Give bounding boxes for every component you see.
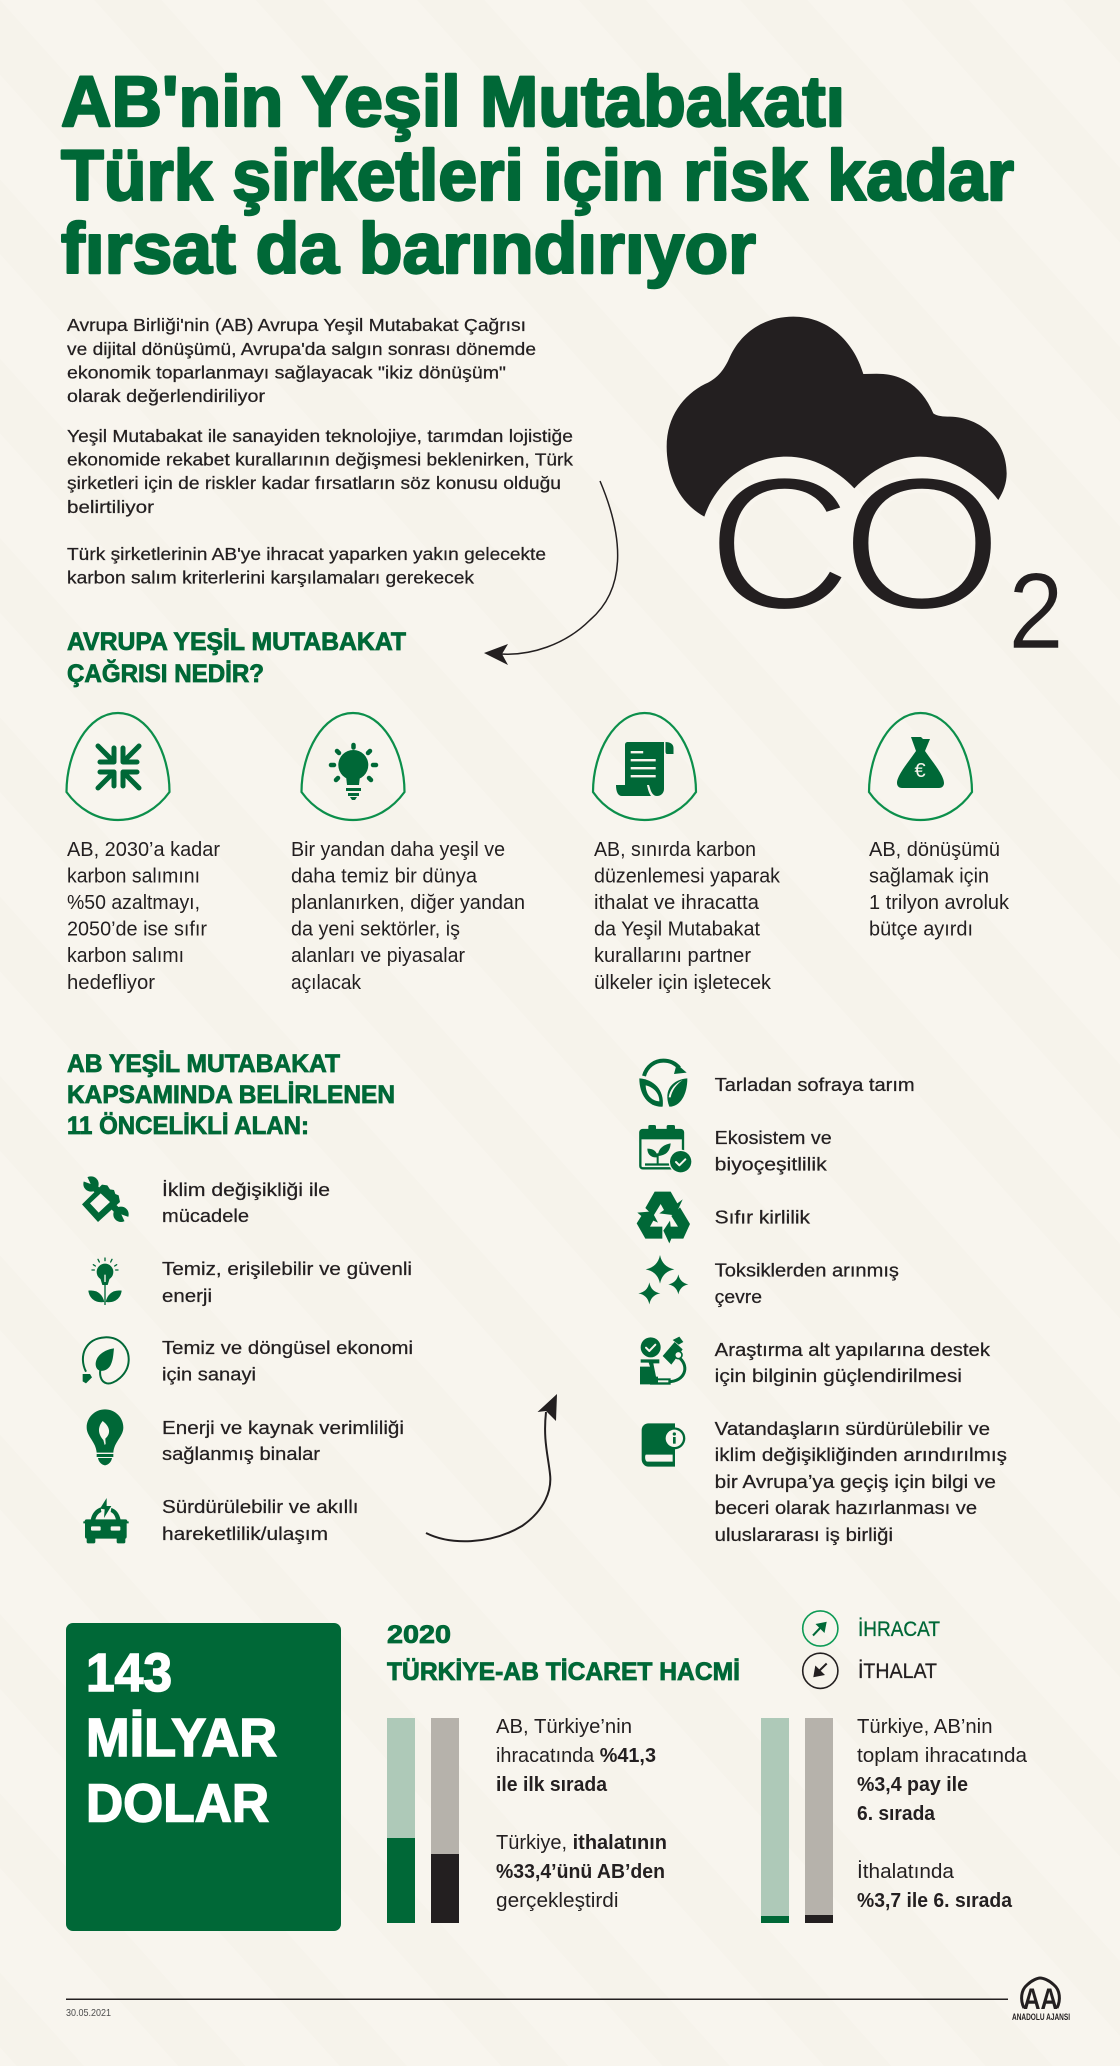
text: item toxic-free — [715, 1260, 899, 1307]
text: item citizens: uluslararası iş birliği — [715, 1524, 893, 1545]
text: card 2: alanları ve piyasalar — [291, 945, 465, 967]
text: item industry — [162, 1337, 413, 1384]
text: card 1: karbon salımını — [67, 866, 200, 888]
icon: CO2 cloud: 2 — [1008, 550, 1064, 671]
item: buildings — [87, 1409, 404, 1465]
text: item climate: İklim değişikliği ile — [162, 1179, 330, 1200]
text: item citizens — [715, 1418, 1007, 1545]
icon: sparkles — [638, 1255, 688, 1304]
text: item farm to fork: Tarladan sofraya tarım — [715, 1074, 915, 1095]
text: EU share: Türkiye, ithalatının — [496, 1832, 667, 1854]
icon: bulb with leaf — [87, 1409, 123, 1465]
text: card 1: AB, 2030’a kadar — [67, 839, 220, 861]
icon: bulb plant — [88, 1258, 122, 1305]
intro text: Türk şirketlerinin AB'ye ihracat yaparken yakın gelecekte — [67, 544, 546, 564]
text: EU share: gerçekleştirdi — [496, 1890, 618, 1912]
text: item research — [715, 1339, 991, 1386]
legend: import: İTHALAT — [858, 1660, 937, 1683]
heading: what is the green deal call: ÇAĞRISI NEDİR? — [67, 659, 264, 688]
text: Turkey share: 6. sırada — [857, 1803, 936, 1825]
intro text: Avrupa Birliği'nin (AB) Avrupa Yeşil Mutabakat Çağrısı — [67, 315, 526, 335]
panel: card 2 — [291, 713, 525, 994]
heading: 2020 trade volume — [387, 1621, 740, 1686]
intro text: Yeşil Mutabakat ile sanayiden teknolojiye, tarımdan lojistiğe — [67, 426, 573, 446]
intro text: olarak değerlendiriliyor — [67, 386, 265, 406]
item: energy — [88, 1258, 412, 1306]
heading: what is the green deal call: AVRUPA YEŞİL MUTABAKAT — [67, 628, 406, 656]
text: item citizens: bir Avrupa’ya geçiş için bilgi ve — [715, 1471, 996, 1492]
text: EU share: AB, Türkiye’nin — [496, 1716, 632, 1738]
arrow: squiggle up — [426, 1394, 557, 1541]
icon: calendar with plant — [640, 1125, 693, 1174]
intro text: ekonomide rekabet kurallarının değişmesi beklenirken, Türk — [67, 450, 573, 470]
intro text: ve dijital dönüşümü, Avrupa'da salgın sonrası dönemde — [67, 339, 536, 359]
panel: 143 billion dollars: 143 — [86, 1643, 172, 1703]
footer line — [66, 1998, 1008, 2000]
item: zero pollution — [637, 1192, 811, 1243]
text: card 2: daha temiz bir dünya — [291, 866, 478, 888]
item: climate — [81, 1174, 330, 1226]
icon: egg light bulb — [302, 713, 404, 820]
text: item ecosystem: Ekosistem ve — [715, 1127, 832, 1148]
panel: 143 billion dollars: MİLYAR — [86, 1708, 277, 1768]
text: card 2: planlanırken, diğer yandan — [291, 892, 525, 914]
title: AB'nin Yeşil Mutabakatı — [61, 63, 845, 142]
item: mobility — [83, 1496, 359, 1544]
text: EU share: %33,4’ünü AB’den — [496, 1861, 665, 1883]
icon: book with info — [642, 1423, 685, 1467]
text: EU share: ihracatında %41,3 — [496, 1745, 656, 1767]
text: card 2: açılacak — [291, 972, 362, 994]
text: item buildings — [162, 1417, 404, 1464]
icon: electric car — [83, 1498, 129, 1543]
legend — [803, 1611, 940, 1688]
heading: 2020 trade volume: TÜRKİYE-AB TİCARET HACMİ — [387, 1657, 740, 1686]
text: card 1: %50 azaltmayı, — [67, 892, 200, 914]
chart: EU share bars — [387, 1718, 459, 1923]
icon: CO2 cloud: O — [841, 438, 1003, 650]
text: card 3: ülkeler için işletecek — [594, 972, 772, 994]
heading: 11 priority areas: 11 ÖNCELİKLİ ALAN: — [67, 1111, 309, 1140]
item: citizens — [642, 1418, 1007, 1545]
intro text: şirketleri için de riskler kadar fırsatların söz konusu olduğu — [67, 473, 561, 493]
text: item energy: Temiz, erişilebilir ve güvenli — [162, 1258, 412, 1279]
date: 30.05.2021 — [66, 2007, 111, 2019]
chart: Turkey share bars — [761, 1718, 833, 1923]
item: farm to fork — [639, 1061, 915, 1107]
item: research — [640, 1337, 991, 1386]
text: card 2: Bir yandan daha yeşil ve — [291, 839, 505, 861]
icon: farm leaves cycle — [639, 1061, 687, 1107]
icon: CO2 cloud — [667, 317, 1064, 671]
intro text — [67, 315, 573, 588]
text: card 4: AB, dönüşümü — [869, 839, 1000, 861]
item: industry — [83, 1337, 413, 1384]
panel: 143 billion dollars: DOLAR — [86, 1774, 269, 1834]
text: Turkey share — [857, 1716, 1028, 1912]
panel: card 4 — [869, 713, 1010, 941]
text: item toxic-free: Toksiklerden arınmış — [715, 1260, 899, 1280]
text: card 3 — [594, 839, 781, 994]
intro text: ekonomik toparlanmayı sağlayacak "ikiz dönüşüm" — [67, 362, 506, 382]
text: card 3: düzenlemesi yaparak — [594, 866, 781, 888]
text: card 1: karbon salımı — [67, 945, 184, 967]
text: card 1 — [67, 839, 220, 994]
icon: CO2 cloud: C — [707, 438, 852, 650]
icon: leaf circuit — [83, 1337, 129, 1384]
text: Turkey share: %3,7 ile 6. sırada — [857, 1890, 1013, 1912]
text: card 1: 2050’de ise sıfır — [67, 919, 207, 941]
title: Türk şirketleri için risk kadar — [61, 137, 1014, 216]
text: item industry: Temiz ve döngüsel ekonomi — [162, 1337, 413, 1358]
text: item citizens: beceri olarak hazırlanması ve — [715, 1497, 977, 1518]
text: card 4: bütçe ayırdı — [869, 919, 973, 941]
title: fırsat da barındırıyor — [61, 210, 756, 289]
legend: export: İHRACAT — [858, 1618, 940, 1641]
text: card 4 — [869, 839, 1010, 941]
text: item toxic-free: çevre — [715, 1286, 762, 1307]
heading: 2020 trade volume: 2020 — [387, 1621, 451, 1649]
text: item climate: mücadele — [162, 1205, 249, 1226]
text: item energy: enerji — [162, 1285, 212, 1306]
text: item research: Araştırma alt yapılarına destek — [715, 1339, 991, 1360]
text: card 3: AB, sınırda karbon — [594, 839, 756, 861]
text: item buildings: sağlanmış binalar — [162, 1443, 320, 1464]
text: item citizens: Vatandaşların sürdürülebilir ve — [715, 1418, 990, 1439]
text: Turkey share: toplam ihracatında — [857, 1745, 1028, 1767]
list: right priority areas — [637, 1061, 1007, 1545]
text: card 3: da Yeşil Mutabakat — [594, 919, 760, 941]
text: Turkey share: Türkiye, AB’nin — [857, 1716, 992, 1738]
icon: egg arrows — [66, 713, 170, 820]
logo: Anadolu Ajansı: ANADOLU AJANSI — [1012, 2012, 1070, 2022]
text: item mobility — [162, 1496, 358, 1544]
text: card 2: da yeni sektörler, iş — [291, 919, 460, 941]
logo: Anadolu Ajansı: AA — [1023, 1983, 1058, 2016]
icon: egg money bag — [869, 713, 972, 820]
text: card 4: 1 trilyon avroluk — [869, 892, 1010, 914]
text: card 2 — [291, 839, 525, 994]
list: left priority areas — [81, 1174, 413, 1544]
text: item mobility: Sürdürülebilir ve akıllı — [162, 1496, 358, 1517]
text: item research: için bilginin güçlendirilmesi — [715, 1365, 962, 1386]
heading: 11 priority areas: KAPSAMINDA BELİRLENEN — [67, 1081, 395, 1109]
text: item buildings: Enerji ve kaynak verimliliği — [162, 1417, 404, 1438]
text: item ecosystem — [715, 1127, 832, 1174]
panel: 143 billion dollars — [66, 1623, 341, 1931]
item: ecosystem — [640, 1125, 832, 1174]
logo: Anadolu Ajansı — [1012, 1978, 1070, 2022]
text: item industry: için sanayi — [162, 1364, 256, 1384]
text: Turkey share: %3,4 pay ile — [857, 1774, 968, 1796]
text: EU share — [496, 1716, 667, 1912]
icon: wrench in hand — [81, 1174, 131, 1224]
heading: 11 priority areas — [67, 1050, 395, 1140]
text: card 4: sağlamak için — [869, 866, 989, 888]
text: item energy — [162, 1258, 412, 1306]
heading: what is the green deal call — [67, 628, 406, 688]
text: card 3: ithalat ve ihracatta — [594, 892, 760, 914]
panel: card 3 — [593, 713, 781, 994]
icon: egg scroll — [593, 713, 696, 820]
item: toxic-free — [638, 1255, 899, 1307]
icon: microscope — [640, 1337, 685, 1385]
text: item zero pollution: Sıfır kirlilik — [715, 1206, 811, 1228]
text: card 1: hedefliyor — [67, 972, 155, 994]
text: Turkey share: İthalatında — [857, 1860, 955, 1883]
icon: recycle — [637, 1192, 690, 1243]
intro text: karbon salım kriterlerini karşılamaları gerekecek — [67, 568, 474, 588]
intro text: belirtiliyor — [67, 497, 154, 517]
arrow: curved to heading — [484, 481, 618, 665]
text: EU share: ile ilk sırada — [496, 1774, 608, 1796]
heading: 11 priority areas: AB YEŞİL MUTABAKAT — [67, 1050, 340, 1078]
panel: card 1 — [66, 713, 220, 994]
title — [61, 63, 1014, 289]
icon: egg money bag: € — [914, 760, 926, 782]
text: item citizens: iklim değişikliğinden arındırılmış — [715, 1444, 1007, 1465]
text: card 3: kurallarını partner — [594, 945, 751, 967]
text: item mobility: hareketlilik/ulaşım — [162, 1523, 328, 1544]
text: item climate — [162, 1179, 330, 1226]
text: item ecosystem: biyoçeşitlilik — [715, 1154, 828, 1174]
